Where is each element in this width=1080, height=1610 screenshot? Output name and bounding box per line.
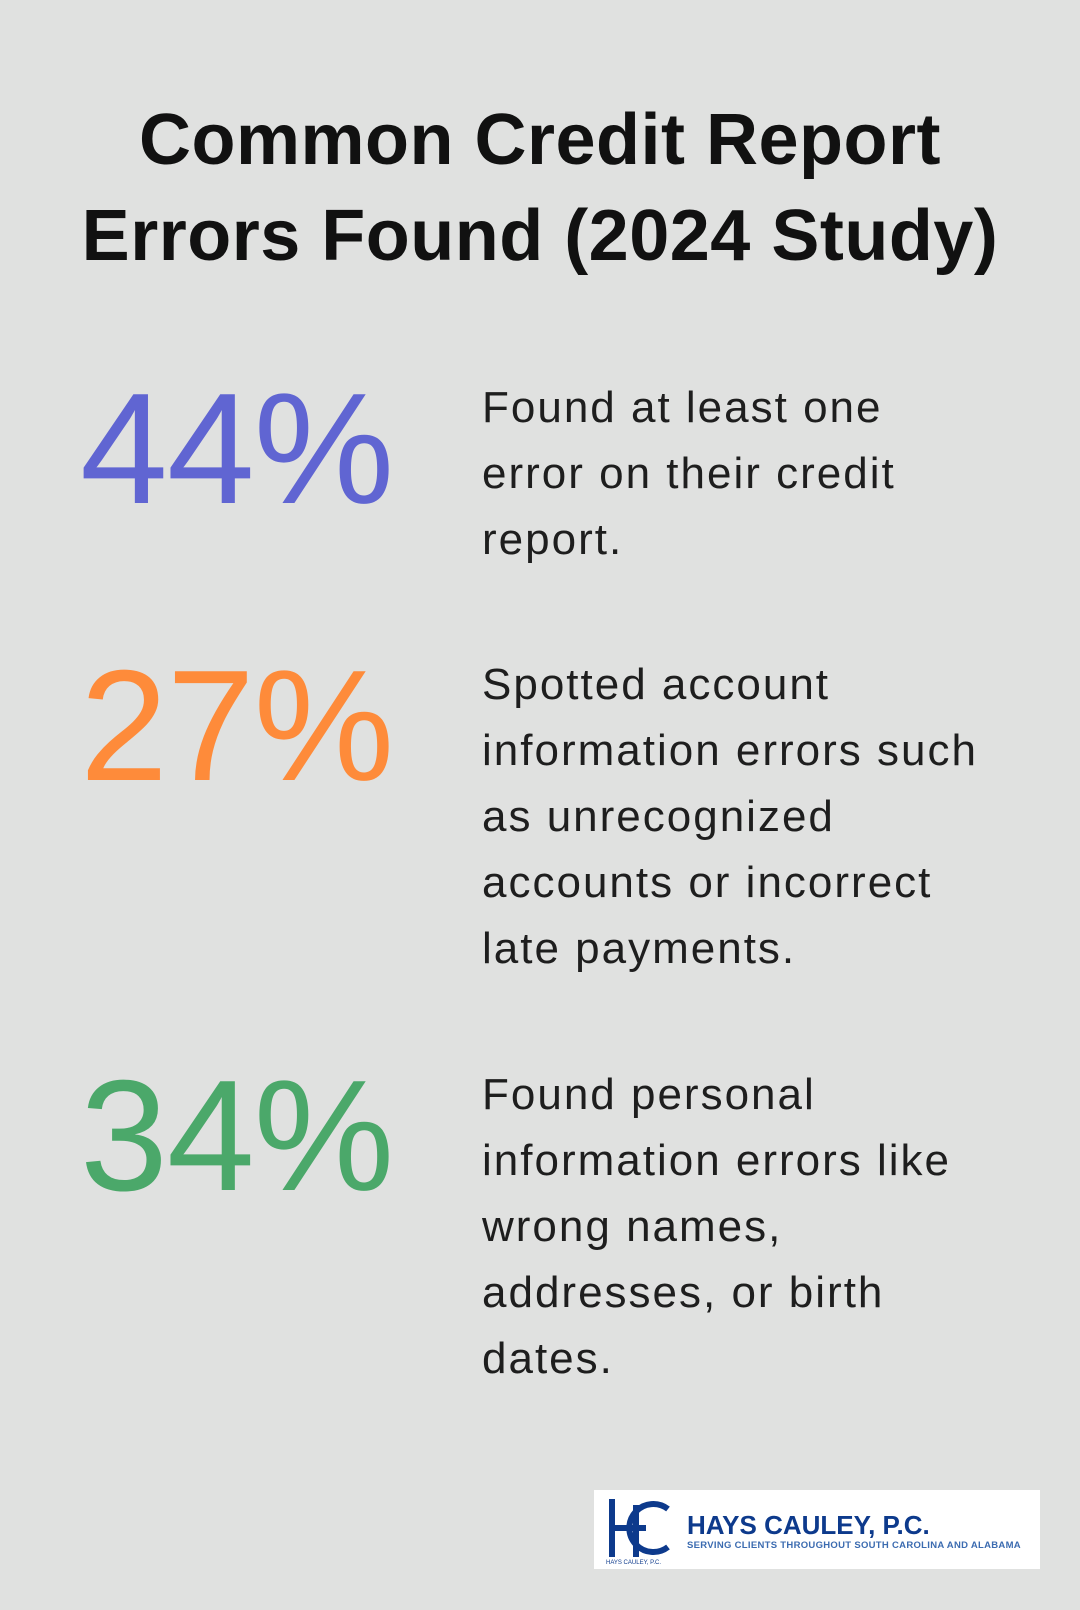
logo name: HAYS CAULEY, P.C. — [687, 1510, 930, 1540]
stat 3 number: 34% — [80, 1048, 393, 1224]
icon: HC monogram — [609, 1499, 670, 1557]
stat 2 description: as unrecognized — [482, 792, 835, 841]
title: Common Credit Report — [139, 100, 941, 180]
stat 3 description — [482, 1070, 951, 1383]
stat 1 description: error on their credit — [482, 449, 896, 498]
stat 2 description: Spotted account — [482, 660, 830, 709]
stat 1 description — [482, 383, 896, 564]
stat 3 description: addresses, or birth — [482, 1268, 884, 1317]
logo tagline: SERVING CLIENTS THROUGHOUT SOUTH CAROLINA AND ALABAMA — [687, 1540, 1021, 1551]
title — [82, 100, 998, 276]
stat 3 description: information errors like — [482, 1136, 951, 1185]
stat 2 description — [482, 660, 978, 973]
stat 1 description: Found at least one — [482, 383, 882, 432]
stat 3 description: Found personal — [482, 1070, 816, 1119]
logo small text: HAYS CAULEY, P.C. — [606, 1560, 661, 1566]
stat 3 description: dates. — [482, 1334, 614, 1383]
logo — [594, 1490, 1040, 1569]
stat 1 number: 44% — [80, 361, 393, 537]
title: Errors Found (2024 Study) — [82, 196, 998, 276]
stat 1 description: report. — [482, 515, 623, 564]
stat 2 description: accounts or incorrect — [482, 858, 932, 907]
stat 2 description: information errors such — [482, 726, 978, 775]
stat 2 description: late payments. — [482, 924, 796, 973]
stat 2 number: 27% — [80, 638, 393, 814]
stat 3 description: wrong names, — [482, 1202, 782, 1251]
